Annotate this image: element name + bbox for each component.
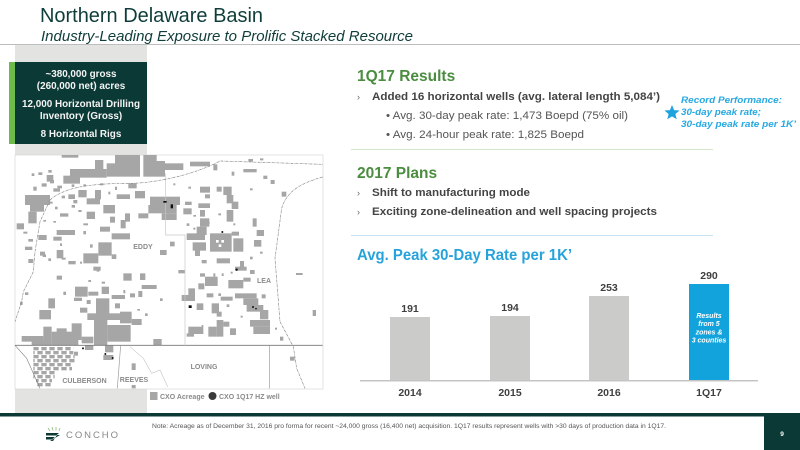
section: 2017 plans: Exciting zone-delineation and well spacing projects [372, 206, 657, 218]
bar chart: 2015 [498, 387, 522, 399]
panel: key acreage stats: Inventory (Gross) [40, 111, 122, 122]
county labels: LOVING [191, 364, 218, 371]
map legend: CXO 1Q17 HZ well [219, 394, 280, 401]
panel: key acreage stats: (260,000 net) acres [37, 81, 126, 92]
bar chart: 290 [700, 270, 718, 282]
logo: CONCHO [66, 430, 118, 441]
county labels: REEVES [120, 377, 149, 384]
panel: key acreage stats: 12,000 Horizontal Drilling [22, 99, 140, 110]
section: 1Q17 results: • Avg. 24-hour peak rate: 1,825 Boepd [386, 129, 584, 141]
county labels [62, 244, 271, 385]
section: 2017 plans: 2017 Plans [357, 165, 437, 182]
bar annotation [692, 313, 726, 344]
section: 2017 plans: Shift to manufacturing mode [372, 187, 530, 199]
county labels: EDDY [133, 244, 153, 251]
holes in acreage [216, 240, 224, 247]
bar chart: 191 [401, 303, 419, 315]
callout: record performance [664, 95, 796, 130]
section: 2017 plans [357, 165, 657, 218]
section: 1Q17 results [357, 68, 660, 141]
bar chart: 2016 [597, 387, 621, 399]
panel: key acreage stats [9, 62, 147, 144]
map of acreage [15, 155, 323, 389]
logo [46, 427, 118, 441]
bar chart: 253 [600, 282, 618, 294]
map legend [150, 392, 280, 401]
acreage blocks [17, 155, 316, 388]
well markers [82, 201, 257, 359]
map legend: CXO Acreage [160, 394, 205, 401]
section: 1Q17 results: Added 16 horizontal wells (avg. lateral length 5,084’) [372, 91, 660, 103]
callout: record performance: Record Performance: [681, 95, 782, 106]
callout: record performance: 30-day peak rate per 1K’ [681, 119, 796, 130]
footnote: Note: Acreage as of December 31, 2016 pro forma for recent ~24,000 gross (16,400 net) acquisition. 1Q17 results represent wells with >30 days of production data in 1Q17. [152, 423, 666, 430]
panel: left sidebar background [15, 45, 147, 413]
chart heading: Avg. Peak 30-Day Rate per 1K’ [357, 247, 572, 264]
bar chart [360, 270, 758, 399]
bar chart: 194 [501, 302, 519, 314]
section: 2017 plans: › [357, 188, 360, 198]
section: 1Q17 results: • Avg. 30-day peak rate: 1,473 Boepd (75% oil) [386, 110, 628, 122]
bar annotation: Results [696, 313, 722, 320]
callout: record performance: 30-day peak rate; [681, 107, 761, 118]
footer bar [0, 413, 800, 450]
panel: key acreage stats: 8 Horizontal Rigs [41, 129, 122, 140]
bar chart: 1Q17 [696, 387, 722, 399]
page number: 9 [780, 431, 784, 438]
bar annotation: from 5 [698, 321, 720, 328]
county labels: LEA [257, 278, 271, 285]
county and border lines [15, 161, 323, 388]
county labels: CULBERSON [62, 378, 107, 385]
title: Northern Delaware Basin [40, 5, 263, 27]
section: 1Q17 results: › [357, 92, 360, 102]
bar chart: 2014 [398, 387, 422, 399]
panel: key acreage stats: ~380,000 gross [45, 69, 117, 80]
bar annotation: 3 counties [692, 338, 726, 344]
subtitle: Industry-Leading Exposure to Prolific Stacked Resource [41, 29, 413, 45]
section: 1Q17 results: 1Q17 Results [357, 68, 455, 85]
checkerboard acreage [33, 347, 75, 387]
bar annotation: zones & [695, 330, 722, 336]
section: 2017 plans: › [357, 207, 360, 217]
